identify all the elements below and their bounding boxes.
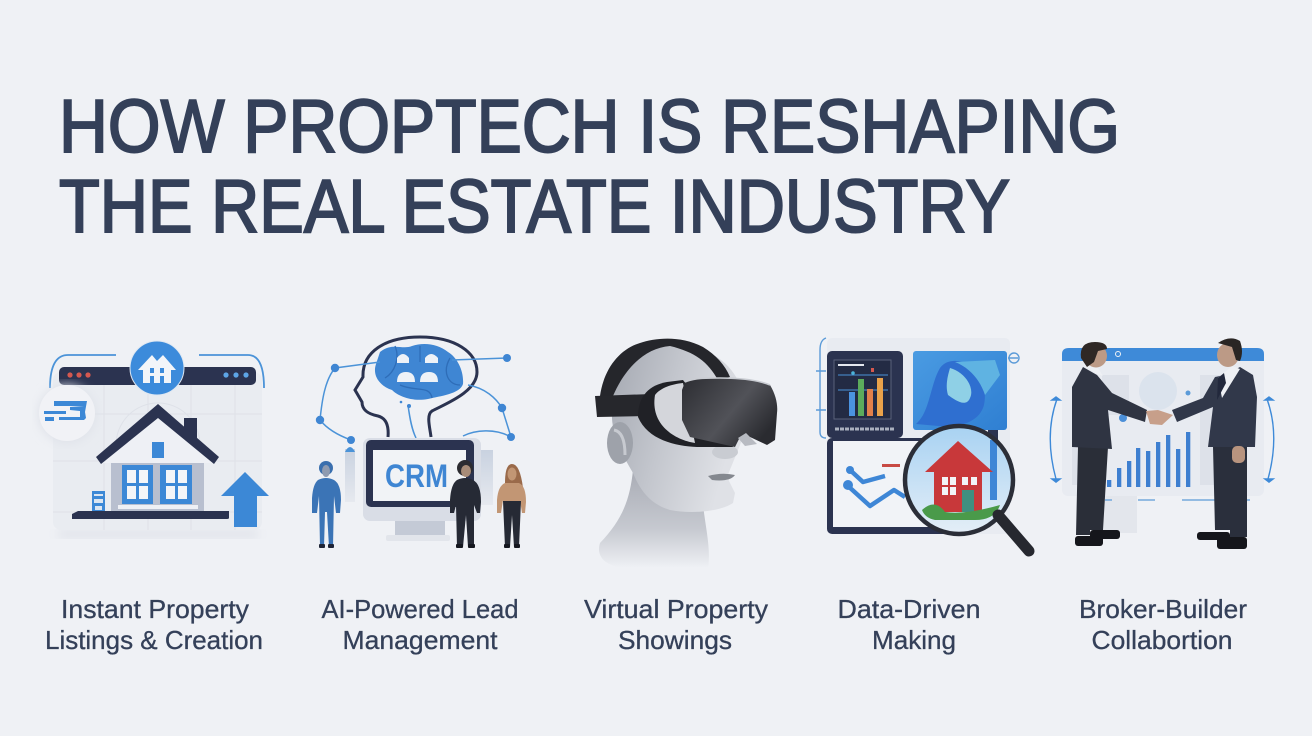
label: Instant Property Listings & Creation: Listings & Creation	[45, 625, 263, 655]
label: Data-Driven Making	[838, 594, 980, 655]
title: THE REAL ESTATE INDUSTRY	[59, 164, 1010, 248]
title: HOW PROPTECH IS RESHAPING	[59, 84, 1120, 168]
label: Data-Driven Making: Making	[872, 625, 956, 655]
icon: head wearing VR headset	[595, 339, 777, 568]
label: Virtual Property Showings: Virtual Property	[584, 594, 768, 624]
label: Broker-Builder Collabortion	[1079, 594, 1247, 655]
icon: broker and builder handshake	[1050, 338, 1274, 549]
label: Virtual Property Showings: Showings	[618, 625, 732, 655]
label: AI-Powered Lead Management: AI-Powered Lead	[322, 594, 518, 624]
label: Broker-Builder Collabortion: Broker-Builder	[1079, 594, 1247, 624]
label: Instant Property Listings & Creation	[45, 594, 263, 655]
label: AI-Powered Lead Management: Management	[342, 625, 498, 655]
label: AI-Powered Lead Management	[322, 594, 518, 655]
title	[59, 84, 1120, 248]
label: Virtual Property Showings	[584, 594, 768, 655]
icon: instant listing browser with house	[38, 341, 269, 538]
CRM label: CRM	[385, 458, 448, 494]
label: Broker-Builder Collabortion: Collabortion	[1092, 625, 1232, 655]
icon: AI brain with CRM monitor and people	[312, 337, 526, 548]
icon: data dashboard with magnifying glass	[816, 338, 1029, 551]
label: Data-Driven Making: Data-Driven	[838, 594, 980, 624]
label: Instant Property Listings & Creation: Instant Property	[61, 594, 249, 624]
